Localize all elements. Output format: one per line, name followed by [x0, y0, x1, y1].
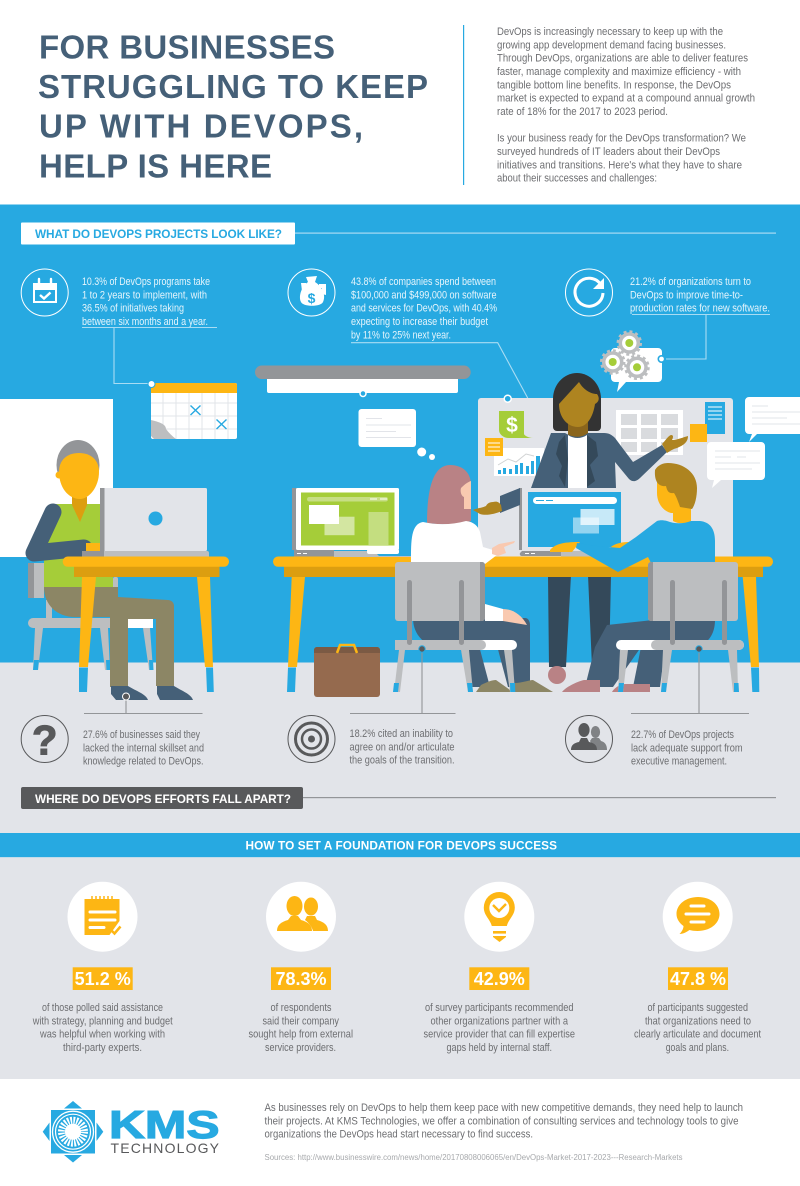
text: 43.8% of companies spend: $100,000 and $499,000 on software — [351, 289, 497, 301]
pants — [585, 620, 715, 687]
card: 51.2 percent: of those polled said assistance — [42, 1002, 163, 1014]
briefcase — [314, 645, 380, 697]
right hand — [662, 435, 688, 453]
dollar note: $ — [506, 414, 518, 437]
panel: foundation background — [0, 857, 800, 1079]
card: 47.8 percent — [634, 882, 761, 1054]
text: 43.8% of companies spend — [351, 276, 497, 341]
title: STRUGGLING TO KEEP — [38, 68, 428, 105]
wall calendar — [148, 380, 237, 439]
ceiling projector screen — [255, 366, 471, 396]
shoes — [562, 680, 650, 692]
card: 51.2 percent — [32, 882, 173, 1054]
card: 42.9 percent: other organizations partner with a — [430, 1015, 568, 1027]
text: 18.2% cited — [350, 728, 455, 767]
hair — [56, 440, 100, 490]
text: 22.7% of devops projects: lack adequate support from — [631, 742, 743, 754]
card: 47.8 percent: of participants suggested — [648, 1002, 748, 1014]
text: 21.2% of organizations: production rates for new software. — [630, 303, 770, 315]
icon: speech bubble — [663, 882, 733, 952]
title: UP WITH DEVOPS, — [39, 108, 363, 144]
text: 10.3% of devops programs — [82, 276, 210, 328]
text: 27.6% of businesses: 27.6% of businesses said they — [83, 729, 201, 741]
line chart card — [494, 448, 544, 476]
white top — [411, 521, 497, 564]
heading banner: how to set a foundation: HOW TO SET A FOUNDATION FOR DEVOPS SUCCESS — [246, 838, 557, 852]
presenter extended hand — [473, 488, 520, 515]
man's chair — [616, 562, 744, 692]
card: 78.3 percent — [248, 882, 353, 1054]
card: 78.3 percent: said their company — [262, 1015, 340, 1027]
title — [38, 28, 428, 184]
text: 43.8% of companies spend: 43.8% of companies spend between — [351, 276, 496, 288]
card: 78.3 percent: of respondents — [270, 1002, 332, 1014]
text: 22.7% of devops projects: 22.7% of DevOps projects — [631, 729, 734, 741]
title: HELP IS HERE — [39, 148, 272, 184]
icon: lightbulb — [464, 882, 534, 952]
card: 42.9 percent: 42.9% — [474, 969, 525, 989]
card: 51.2 percent: was helpful when working with — [39, 1029, 165, 1041]
collar — [72, 497, 87, 522]
man at table — [550, 463, 715, 692]
card: 47.8 percent: clearly articulate and document — [634, 1029, 761, 1041]
intro text: market is expected to expand at a compound annual growth — [497, 93, 755, 105]
icon: money bag: $ — [308, 290, 316, 306]
intro text — [497, 26, 755, 185]
icon: question mark: ? — [32, 716, 58, 764]
card: 51.2 percent: third-party experts. — [63, 1042, 142, 1054]
dollar note — [499, 411, 533, 438]
legs — [548, 575, 611, 667]
card: 47.8 percent: that organizations need to — [645, 1015, 751, 1027]
text: 21.2% of organizations: DevOps to improve time-to- — [630, 289, 743, 301]
orange note — [485, 438, 503, 456]
closing text: their projects. At KMS Technologies, we offer a combination of consulting services and technology tools to give — [264, 1115, 739, 1127]
closing text: organizations the DevOps head start necessary to find success. — [264, 1129, 533, 1141]
pointing hand — [492, 541, 515, 556]
gears speech bubble — [601, 332, 665, 392]
panel: what do devops projects look like background — [0, 204, 800, 662]
text: 18.2% cited: the goals of the transition. — [350, 755, 454, 767]
text: 10.3% of devops programs: between six months and a year. — [82, 316, 208, 328]
text: 21.2% of organizations — [630, 276, 770, 315]
text: 43.8% of companies spend: by 11% to 25% next year. — [351, 329, 451, 341]
desk top — [74, 566, 220, 577]
closing text: As businesses rely on DevOps to help them keep pace with new competitive demands, they need help to launch — [264, 1102, 743, 1114]
card: 78.3 percent: 78.3% — [275, 969, 327, 989]
card: 78.3 percent: service providers. — [265, 1042, 336, 1054]
woman's chair — [393, 562, 517, 692]
text: 18.2% cited: agree on and/or articulate — [350, 741, 455, 753]
text: 10.3% of devops programs: 10.3% of DevOps programs take — [82, 276, 210, 288]
torso — [44, 504, 113, 587]
face — [461, 481, 471, 509]
icon: refresh arrow — [566, 269, 612, 316]
hair — [427, 465, 471, 524]
card: 42.9 percent: of survey participants recommended — [425, 1002, 574, 1014]
logo: KMS Technology — [43, 1101, 220, 1162]
panel: left white wall — [0, 399, 113, 557]
pants — [413, 618, 530, 687]
text: 22.7% of devops projects — [631, 729, 743, 768]
text: 43.8% of companies spend: and services for DevOps, with 40.4% — [351, 303, 497, 315]
presenter woman — [531, 373, 688, 685]
blue document — [705, 402, 725, 434]
intro text: faster, manage complexity and maximize efficiency - with — [497, 66, 741, 78]
icon: notepad — [68, 882, 138, 952]
closing text — [264, 1102, 743, 1141]
heading: where do devops efforts fall apart — [21, 787, 303, 809]
heading: where do devops efforts fall apart: WHERE DO DEVOPS EFFORTS FALL APART? — [35, 792, 291, 806]
title: FOR BUSINESSES — [39, 28, 335, 66]
intro text: Is your business ready for the DevOps transformation? We — [497, 133, 746, 145]
green laptop — [292, 488, 413, 557]
intro text: rate of 18% for the 2017 to 2023 period. — [497, 106, 668, 118]
hair — [655, 463, 697, 509]
intro text: Through DevOps, organizations are able to deliver features — [497, 53, 748, 65]
intro text: about their successes and challenges: — [497, 173, 657, 185]
card: 47.8 percent: 47.8 % — [670, 969, 726, 989]
desk legs — [79, 577, 213, 667]
sources: Sources: http://www.businesswire.com/news/home/20170808006065/en/DevOps-Market-2017-2023---Research-Markets — [264, 1153, 682, 1162]
logo mark — [43, 1101, 103, 1162]
laptop base — [82, 551, 209, 557]
intro text: DevOps is increasingly necessary to keep up with the — [497, 26, 723, 38]
whiteboard — [478, 395, 733, 563]
chair legs — [33, 600, 153, 670]
callout lines: failure points — [84, 650, 749, 714]
card: 51.2 percent: 51.2 % — [75, 969, 131, 989]
jacket — [531, 433, 667, 488]
thought bubble note — [358, 409, 435, 460]
center table — [273, 556, 773, 692]
card: 51.2 percent: with strategy, planning and budget — [32, 1015, 173, 1027]
hair — [553, 373, 601, 431]
heading: what do devops projects look like — [21, 222, 295, 244]
icon: question mark — [21, 716, 68, 764]
shoes — [111, 686, 193, 700]
shoes — [476, 680, 553, 692]
text: 10.3% of devops programs: 1 to 2 years to implement, with — [82, 289, 207, 301]
man at left desk — [28, 440, 193, 700]
face — [59, 453, 99, 499]
card: 42.9 percent: gaps held by internal staff. — [446, 1042, 552, 1054]
text: 27.6% of businesses: knowledge related to DevOps. — [83, 756, 204, 768]
sweater — [576, 520, 715, 572]
right speech bubbles — [707, 397, 800, 488]
face — [559, 382, 599, 427]
text: 27.6% of businesses: lacked the internal skillset and — [83, 742, 204, 754]
sleeve — [485, 604, 503, 621]
icon: calendar check — [21, 269, 68, 316]
icon: money bag — [288, 269, 335, 316]
text: 10.3% of devops programs: 36.5% of initiatives taking — [82, 303, 184, 315]
heading banner: how to set a foundation — [0, 833, 800, 857]
intro text: growing app development demand facing businesses. — [497, 39, 726, 51]
icon: two people — [566, 716, 612, 762]
laptop lid — [100, 488, 207, 551]
text: 21.2% of organizations: 21.2% of organizations turn to — [630, 276, 751, 288]
face — [657, 482, 683, 513]
pants — [44, 587, 174, 687]
left desk and laptop — [63, 488, 229, 692]
panel: floor background — [0, 662, 800, 834]
heading: what do devops projects look like: WHAT DO DEVOPS PROJECTS LOOK LIKE? — [35, 227, 282, 241]
hands — [550, 542, 630, 554]
shoes — [548, 666, 615, 685]
intro text: tangible bottom line benefits. In response, the DevOps — [497, 79, 731, 91]
card: 47.8 percent: goals and plans. — [666, 1042, 729, 1054]
text: 18.2% cited: 18.2% cited an inability to — [350, 728, 453, 740]
icon: people — [266, 882, 336, 952]
intro text: initiatives and transitions. Here's what they have to share — [497, 159, 742, 171]
card: 42.9 percent: service provider that can fill expertise — [424, 1029, 575, 1041]
card: 42.9 percent — [424, 882, 575, 1054]
card: 78.3 percent: sought help from external — [248, 1029, 353, 1041]
text: 22.7% of devops projects: executive management. — [631, 756, 727, 768]
logo: KMS Technology: TECHNOLOGY — [110, 1140, 220, 1156]
text: 27.6% of businesses — [83, 729, 204, 768]
intro text: surveyed hundreds of IT leaders about their DevOps — [497, 146, 720, 158]
arm — [34, 512, 84, 553]
neck — [568, 422, 588, 438]
text: 43.8% of companies spend: expecting to increase their budget — [351, 316, 488, 328]
woman at table — [411, 465, 553, 692]
table card — [616, 410, 683, 455]
chair seat — [28, 618, 153, 628]
logo: KMS Technology: KMS — [109, 1104, 220, 1147]
neck — [673, 506, 691, 523]
icon: target — [288, 716, 335, 762]
center laptop — [519, 488, 623, 556]
chair back — [28, 563, 44, 598]
